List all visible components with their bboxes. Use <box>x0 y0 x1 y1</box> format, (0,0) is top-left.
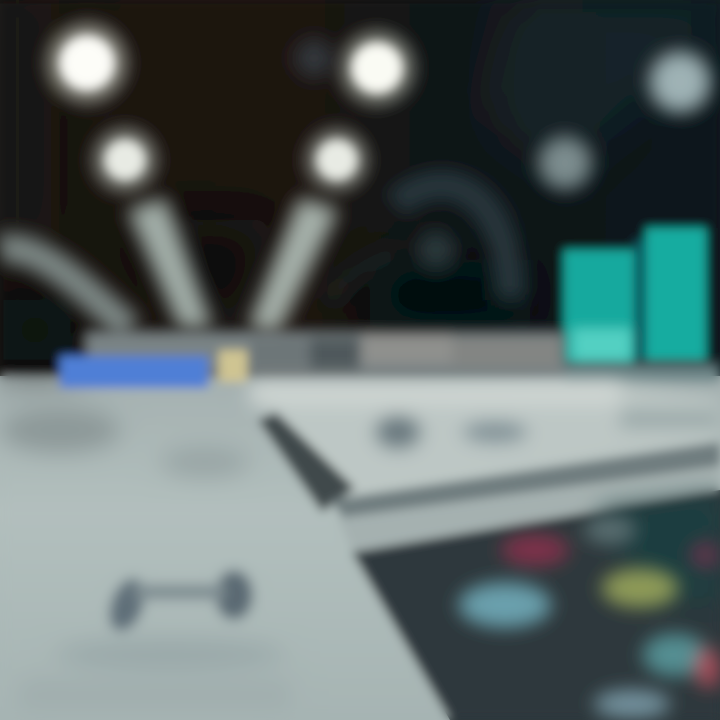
light: mid right <box>539 137 591 189</box>
yellow marker <box>219 350 247 382</box>
light: upper right <box>650 52 710 112</box>
blue panel <box>60 356 208 388</box>
light: mid centre <box>308 131 366 189</box>
light: upper centre <box>342 33 412 103</box>
button: red <box>696 648 720 688</box>
button: olive <box>602 569 678 607</box>
console edge stripe dark <box>330 442 720 520</box>
button: teal <box>643 634 707 676</box>
button: maroon <box>501 534 569 566</box>
panel buttons <box>459 516 720 718</box>
console details <box>250 383 720 448</box>
button: magenta <box>690 541 720 569</box>
ceiling fill <box>0 0 720 376</box>
console top <box>260 385 720 505</box>
arc structure <box>330 185 510 300</box>
console edge stripe light <box>338 466 720 550</box>
floor device shadow <box>55 639 285 671</box>
console dark wedge <box>258 412 355 512</box>
light: dim centre <box>294 38 334 78</box>
dark control panel <box>352 490 720 720</box>
floor shading <box>0 408 290 710</box>
ceiling structure <box>0 0 720 360</box>
base dark panel corner <box>352 490 720 720</box>
floor device shape <box>104 571 252 636</box>
left arc beam <box>0 249 130 330</box>
light streak left <box>128 198 212 328</box>
light streak right <box>248 198 338 332</box>
button: pale blue <box>594 690 670 718</box>
base ceiling <box>0 0 720 376</box>
base floor <box>0 376 720 720</box>
floor fill <box>0 376 720 720</box>
horizon band <box>85 332 720 382</box>
button: grey <box>584 516 636 544</box>
teal panels <box>564 228 706 362</box>
button: blue <box>459 583 551 627</box>
light: mid left <box>95 130 155 190</box>
panel tint <box>600 495 720 600</box>
light: upper left <box>49 25 125 101</box>
